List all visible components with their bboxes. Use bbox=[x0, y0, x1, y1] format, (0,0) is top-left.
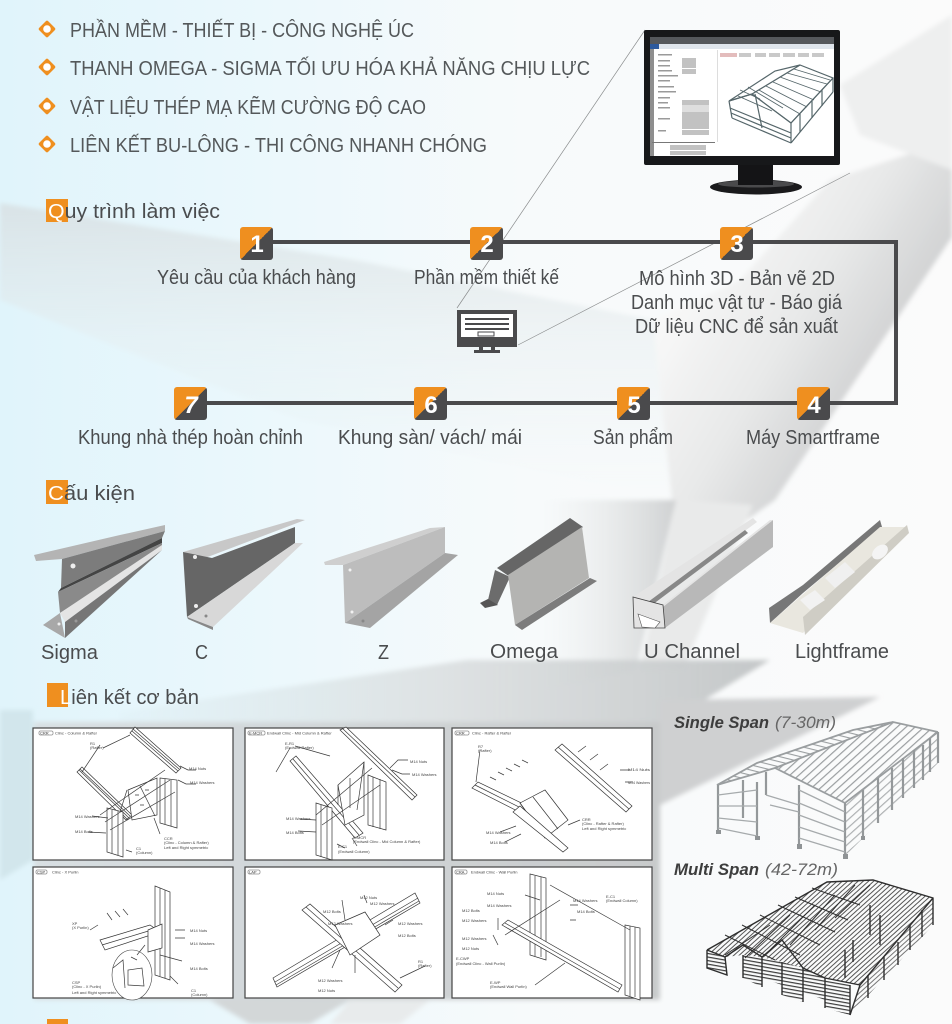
diagram: CRR2 clevis rafter: M14 Nuts bbox=[628, 767, 650, 772]
component: U Channel bbox=[633, 518, 773, 663]
diagram: LAP purlin splice: M12 Bolts bbox=[323, 909, 341, 914]
diagram: CSP clinc Z purlin bbox=[33, 867, 233, 1000]
heading: next section (cropped) bbox=[47, 1019, 68, 1024]
diagram: CRR clevis column and rafter: (Clinc - Column & Rafter) bbox=[164, 840, 209, 845]
diagram: CRR clevis column and rafter: CRR bbox=[40, 730, 49, 736]
diagram: LAP purlin splice: R1 bbox=[418, 959, 424, 964]
diagram: LAP purlin splice bbox=[245, 867, 444, 998]
label: U Channel: U Channel bbox=[644, 641, 740, 663]
diagram: EWCR endwall clinc: (Endwall Clinc - Mid Column & Rafter) bbox=[353, 839, 421, 844]
diagram: CSP clinc Z purlin: Clinc - X Purlin bbox=[52, 870, 78, 874]
diagram: EWCR endwall clinc: M14 Washers bbox=[286, 816, 311, 821]
diagram: EWA endwall clinc wall purlin: M14 Washers bbox=[487, 903, 512, 908]
step 3: Danh mục vật tư - Báo giá bbox=[631, 292, 843, 314]
diagram: EWCR endwall clinc bbox=[245, 727, 444, 860]
diagram: CSP clinc Z purlin: M14 Washers bbox=[190, 941, 215, 946]
monitor stand bbox=[710, 164, 802, 194]
diagram: CRR clevis column and rafter bbox=[33, 727, 233, 860]
illustration: single span steel frame bbox=[716, 722, 938, 859]
component: C bbox=[183, 519, 305, 664]
diagram: EWA endwall clinc wall purlin: M14 Bolts bbox=[577, 909, 595, 914]
diagram: EWA endwall clinc wall purlin: (Endwall Column) bbox=[606, 898, 638, 903]
diagram: CSP clinc Z purlin: CSP bbox=[37, 870, 46, 874]
3D building on screen bbox=[729, 65, 833, 143]
diagram: LAP purlin splice: M12 Washers bbox=[398, 921, 423, 926]
icon: bullet 2 bbox=[40, 60, 54, 74]
component: Omega bbox=[480, 518, 597, 663]
diagram: LAP purlin splice: M12 Nuts bbox=[318, 988, 335, 993]
heading: Single Span: (7-30m) bbox=[775, 713, 836, 732]
diagram: EWCR endwall clinc: E-R1 bbox=[285, 741, 295, 746]
diagram: EWA endwall clinc wall purlin: M12 Washers bbox=[462, 918, 487, 923]
step 3: 3 bbox=[730, 231, 744, 258]
icon: computer monitor bbox=[459, 312, 515, 353]
diagram: CRR2 clevis rafter bbox=[452, 728, 652, 860]
diagram: CRR2 clevis rafter: M14 Washers bbox=[486, 830, 511, 835]
step 5 bbox=[593, 387, 673, 449]
heading: Single Span: Single Span bbox=[674, 713, 769, 732]
label: C: C bbox=[195, 642, 208, 664]
monitor screen bbox=[650, 37, 834, 156]
diagram: CSP clinc Z purlin: (Clinc - X Purlin) bbox=[72, 984, 102, 989]
step 5: Sản phẩm bbox=[593, 427, 673, 449]
icon: bullet 1 bbox=[40, 22, 54, 36]
diagram: LAP purlin splice: LAP bbox=[249, 870, 257, 874]
step 2: 2 bbox=[480, 231, 494, 258]
list item 4: LIÊN KẾT BU-LÔNG - THI CÔNG NHANH CHÓNG bbox=[70, 134, 487, 157]
diagram: EWA endwall clinc wall purlin: M14 Washers bbox=[573, 898, 598, 903]
diagram: CRR2 clevis rafter: M14 Washers bbox=[628, 780, 650, 785]
diagram: EWA endwall clinc wall purlin: E-CWP bbox=[456, 956, 470, 961]
diagram: LAP purlin splice: M12 Washers bbox=[370, 901, 395, 906]
diagram: EWCR endwall clinc: M14 Nuts bbox=[410, 759, 427, 764]
diagram: CSP clinc Z purlin: CSP bbox=[72, 980, 81, 985]
diagram: LAP purlin splice: M12 Bolts bbox=[398, 933, 416, 938]
diagram: CRR2 clevis rafter: R7 bbox=[478, 744, 484, 749]
step 7: Khung nhà thép hoàn chỉnh bbox=[78, 427, 303, 449]
diagram: EWA endwall clinc wall purlin: M14 Nuts bbox=[487, 891, 504, 896]
step 6: 6 bbox=[424, 392, 438, 419]
connection diagrams bbox=[33, 727, 652, 1000]
diagram: CRR2 clevis rafter: M14 Bolts bbox=[490, 840, 508, 845]
heading: Multi Span: (42-72m) bbox=[765, 860, 838, 879]
diagram: CSP clinc Z purlin: C1 bbox=[191, 988, 197, 993]
diagram: LAP purlin splice: M12 Washers bbox=[318, 978, 343, 983]
label: Sigma: Sigma bbox=[41, 642, 99, 664]
component: Z bbox=[324, 527, 458, 664]
diagram: EWA endwall clinc wall purlin bbox=[452, 867, 652, 1000]
diagram: EWA endwall clinc wall purlin: E-C1 bbox=[606, 894, 616, 899]
diagram: EWCR endwall clinc: (Endwall Column) bbox=[338, 849, 370, 854]
diagram: CRR clevis column and rafter: CCR bbox=[164, 836, 173, 841]
diagram: EWA endwall clinc wall purlin: Endwall Clinc - Wall Purlin bbox=[471, 870, 518, 874]
diagram: EWCR endwall clinc: E-MCR bbox=[249, 730, 262, 736]
heading: Quy trình làm việc: Quy trình làm việc bbox=[48, 201, 220, 223]
diagram: EWA endwall clinc wall purlin: CRA bbox=[456, 870, 465, 874]
diagram: CRR2 clevis rafter: Left and Right symmetric bbox=[582, 826, 626, 831]
diagram: CRR2 clevis rafter: (Rafter) bbox=[478, 748, 492, 753]
diagram: CRR clevis column and rafter: Clinc - Column & Rafter bbox=[55, 730, 98, 736]
diagram: CRR2 clevis rafter: Clinc - Rafter & Rafter bbox=[472, 730, 512, 736]
process flow bbox=[78, 227, 896, 449]
components bbox=[34, 518, 909, 664]
heading: Liên kết cơ bản: Liên kết cơ bản bbox=[60, 687, 199, 709]
step 3: Dữ liệu CNC để sản xuất bbox=[635, 316, 838, 338]
list item 1: PHẦN MỀM - THIẾT BỊ - CÔNG NGHỆ ÚC bbox=[70, 19, 414, 42]
step 6: Khung sàn/ vách/ mái bbox=[338, 427, 522, 449]
diagram: CRR clevis column and rafter: (Rafter) bbox=[90, 745, 104, 750]
heading: Cấu kiện: Cấu kiện bbox=[48, 483, 135, 505]
label: Omega: Omega bbox=[490, 641, 559, 663]
heading: Multi Span: Multi Span bbox=[674, 860, 759, 879]
diagram: EWCR endwall clinc: M14 Bolts bbox=[286, 830, 304, 835]
icon: bullet 3 bbox=[40, 100, 54, 112]
diagram: EWA endwall clinc wall purlin: M12 Washers bbox=[462, 936, 487, 941]
diagram: LAP purlin splice: M12 Nuts bbox=[360, 895, 377, 900]
feature list bbox=[40, 19, 590, 157]
diagram: EWA endwall clinc wall purlin: (Endwall Clinc - Wall Purlin) bbox=[456, 961, 506, 966]
diagram: EWA endwall clinc wall purlin: (Endwall Wall Purlin) bbox=[490, 984, 527, 989]
diagram: CRR clevis column and rafter: M14 Washers bbox=[75, 814, 100, 819]
label: Z: Z bbox=[378, 642, 389, 664]
step 1: Yêu cầu của khách hàng bbox=[157, 267, 356, 289]
diagram: EWCR endwall clinc: (Endwall Rafter) bbox=[285, 745, 314, 750]
label: Lightframe: Lightframe bbox=[795, 641, 889, 663]
step 3: Mô hình 3D - Bản vẽ 2D bbox=[639, 268, 835, 290]
flow connector line bbox=[190, 242, 896, 403]
diagram: CSP clinc Z purlin: (Column) bbox=[191, 992, 208, 997]
diagram: EWCR endwall clinc: E-C1 bbox=[338, 844, 348, 849]
diagram: EWA endwall clinc wall purlin: M12 Nuts bbox=[462, 946, 479, 951]
step 4: Máy Smartframe bbox=[746, 427, 880, 449]
step 7: 7 bbox=[184, 392, 199, 419]
diagram: CSP clinc Z purlin: M14 Nuts bbox=[190, 928, 207, 933]
step 4 bbox=[746, 387, 880, 449]
diagram: EWCR endwall clinc: E-MCR bbox=[353, 835, 366, 840]
diagram: CRR clevis column and rafter: M14 Nuts bbox=[189, 766, 206, 771]
monitor with 3D software bbox=[644, 30, 840, 194]
diagram: CSP clinc Z purlin: (X Purlin) bbox=[72, 925, 89, 930]
icon: bullet 4 bbox=[40, 138, 54, 150]
diagram: EWCR endwall clinc: Endwall Clinc - Mid Column & Rafter bbox=[267, 730, 332, 736]
illustration: multi span steel frame bbox=[707, 880, 933, 1015]
step 5: 5 bbox=[627, 392, 641, 419]
list item 2: THANH OMEGA - SIGMA TỐI ƯU HÓA KHẢ NĂNG CHỊU LỰC bbox=[70, 56, 590, 80]
component: Lightframe bbox=[769, 520, 909, 663]
list item 3: VẬT LIỆU THÉP MẠ KẼM CƯỜNG ĐỘ CAO bbox=[70, 95, 426, 119]
diagram: EWCR endwall clinc: M14 Washers bbox=[412, 772, 437, 777]
diagram: CRR clevis column and rafter: C1 bbox=[136, 846, 142, 851]
diagram: CSP clinc Z purlin: Left and Right symmetric bbox=[72, 990, 116, 995]
component: Sigma bbox=[34, 525, 165, 664]
leader lines from icon to monitor bbox=[457, 30, 850, 345]
step 1: 1 bbox=[250, 231, 264, 258]
diagram: CRR clevis column and rafter: (Column) bbox=[136, 850, 153, 855]
diagram: CRR clevis column and rafter: M14 Bolts bbox=[75, 829, 93, 834]
diagram: CSP clinc Z purlin: M14 Bolts bbox=[190, 966, 208, 971]
diagram: EWA endwall clinc wall purlin: E-WP bbox=[490, 980, 501, 985]
step 2 bbox=[414, 227, 559, 289]
diagram: CRR clevis column and rafter: Left and Right symmetric bbox=[164, 845, 208, 850]
diagram: LAP purlin splice: M12 Washers bbox=[328, 921, 353, 926]
step 1 bbox=[157, 227, 356, 289]
diagram: CRR clevis column and rafter: R1 bbox=[90, 741, 96, 746]
diagram: CRR2 clevis rafter: CRR bbox=[456, 730, 465, 736]
monitor frame bbox=[644, 30, 840, 165]
step 4: 4 bbox=[807, 392, 821, 419]
step 7 bbox=[78, 387, 303, 449]
step 3 bbox=[631, 227, 843, 338]
diagram: CSP clinc Z purlin: XP bbox=[72, 921, 78, 926]
diagram: CRR2 clevis rafter: CRR bbox=[582, 817, 591, 822]
step 2: Phần mềm thiết kế bbox=[414, 267, 559, 289]
diagram: LAP purlin splice: (Rafter) bbox=[418, 963, 432, 968]
step 6 bbox=[338, 387, 522, 449]
diagram: CRR clevis column and rafter: M14 Washers bbox=[190, 780, 215, 785]
diagram: CRR2 clevis rafter: (Clinc - Rafter & Rafter) bbox=[582, 821, 624, 826]
diagram: EWA endwall clinc wall purlin: M12 Bolts bbox=[462, 908, 480, 913]
